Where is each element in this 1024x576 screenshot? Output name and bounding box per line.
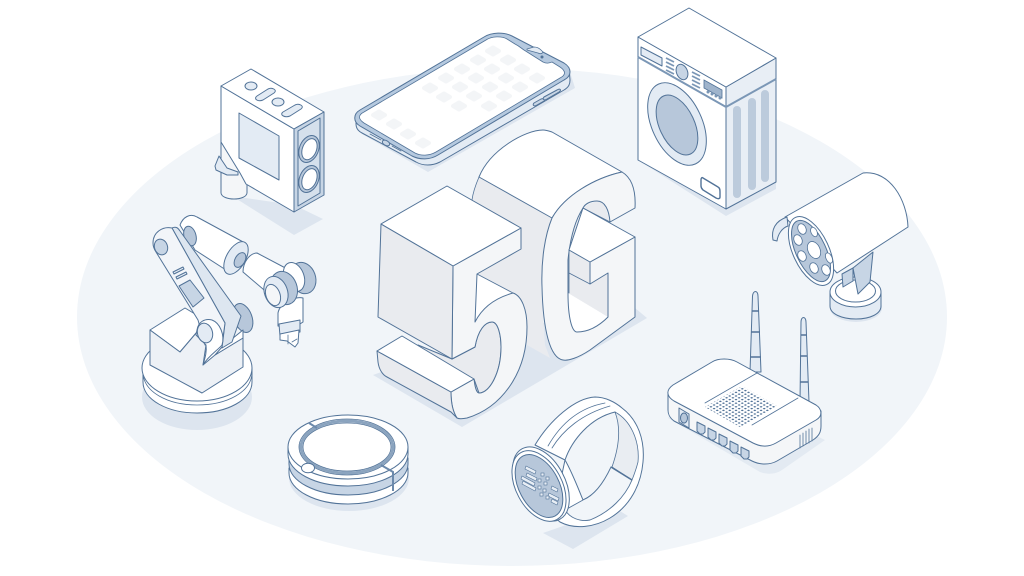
5 white notch	[475, 274, 513, 322]
washer drain panel	[701, 178, 720, 199]
watch screen	[505, 447, 573, 525]
arm cylinder end	[219, 238, 253, 278]
G bar top	[569, 208, 635, 262]
arm rear pivot	[229, 301, 257, 335]
vacuum button	[302, 463, 314, 473]
router vents	[800, 428, 812, 448]
arm body	[150, 330, 243, 393]
arm link side	[172, 227, 241, 348]
sensor hex nut	[215, 156, 238, 175]
washer knob	[674, 63, 690, 81]
watch band hole	[565, 412, 620, 500]
camera lens face	[779, 210, 843, 292]
arm link label bars	[173, 267, 204, 307]
device: robot vacuum	[288, 415, 409, 511]
arm wrist front disc	[266, 268, 302, 308]
washer top	[638, 8, 776, 87]
router panel lines	[705, 373, 798, 425]
phone shadow	[362, 72, 575, 172]
5G letters	[373, 130, 647, 427]
camera housing	[785, 173, 908, 273]
5 foot top	[377, 336, 474, 392]
sensor lenses	[295, 132, 323, 166]
arm forearm	[243, 253, 293, 295]
router mesh	[705, 386, 777, 427]
device: washing machine	[636, 8, 776, 216]
router ports	[697, 422, 749, 459]
camera bracket	[842, 252, 873, 294]
sensor front face	[221, 86, 294, 212]
vacuum ring	[301, 421, 393, 473]
watch bezel	[501, 437, 581, 531]
phone speaker	[527, 47, 543, 54]
5 cube side	[378, 224, 453, 359]
vacuum upper layer	[288, 447, 408, 486]
vacuum lower layer	[289, 468, 408, 504]
5 foot side	[377, 351, 457, 418]
device: robot arm	[142, 215, 320, 430]
watch band seams	[548, 403, 610, 448]
arm link front	[153, 228, 225, 345]
vacuum bumper seam	[309, 423, 393, 491]
sensor shadow	[232, 196, 323, 235]
watch band outer	[535, 397, 643, 527]
camera sun shield	[773, 217, 788, 241]
background ellipse	[77, 68, 947, 566]
5 cube top	[381, 186, 521, 266]
device: smartphone	[355, 33, 575, 172]
router power jack	[679, 408, 689, 428]
camera base	[830, 293, 881, 319]
arm upper cylinder	[180, 215, 245, 270]
router antennas	[750, 292, 809, 402]
phone side buttons	[533, 99, 545, 106]
vacuum shadow	[289, 445, 409, 511]
washer strips	[733, 90, 769, 198]
sensor lens face	[294, 112, 324, 212]
5 face	[451, 228, 527, 419]
arm rear joint	[182, 225, 198, 247]
washer shadow	[638, 160, 776, 216]
phone screen	[360, 37, 564, 155]
sensor connector	[221, 130, 247, 199]
arm link top pin	[152, 237, 170, 257]
phone app grid	[373, 48, 543, 146]
washer display	[641, 47, 662, 66]
arm elbow fork	[196, 319, 223, 365]
5G shadow	[373, 308, 647, 427]
device: router	[668, 292, 825, 474]
washer control block	[704, 80, 722, 98]
device: smart watch	[501, 397, 643, 549]
watch shadow	[543, 508, 628, 549]
camera LEDs	[792, 222, 834, 277]
arm shoulder wedge	[215, 330, 243, 355]
phone body	[356, 68, 570, 165]
arm wrist rear disc	[286, 259, 320, 297]
G hole gray	[568, 202, 610, 317]
arm shadow	[142, 364, 252, 430]
watch band inside	[612, 412, 638, 480]
sensor screen	[239, 113, 279, 180]
washer right side	[726, 58, 776, 209]
washer front	[638, 37, 726, 209]
vacuum mid layer	[289, 458, 408, 495]
G inner side wall	[472, 177, 552, 358]
washer band	[638, 57, 776, 107]
arm base	[143, 368, 252, 413]
phone charging port	[370, 134, 401, 151]
router body	[668, 394, 821, 464]
5 bowl inside	[418, 322, 501, 393]
vacuum top	[288, 415, 408, 479]
router top	[668, 359, 821, 446]
G face	[542, 172, 635, 360]
arm gripper	[278, 298, 303, 347]
camera base shadow	[830, 294, 882, 322]
sensor top face	[221, 69, 324, 129]
watch display glyphs	[521, 466, 559, 505]
sensor buttons	[245, 82, 302, 117]
washer vent lines	[666, 58, 700, 88]
device: security camera	[773, 173, 908, 322]
G hole white	[568, 293, 608, 332]
G top band	[479, 130, 622, 218]
arm elbow pivot	[195, 321, 215, 345]
router shadow	[668, 380, 825, 474]
device: proximity sensor	[215, 69, 324, 235]
phone rim	[355, 33, 570, 159]
arm body top	[150, 308, 205, 352]
washer door	[636, 74, 718, 174]
